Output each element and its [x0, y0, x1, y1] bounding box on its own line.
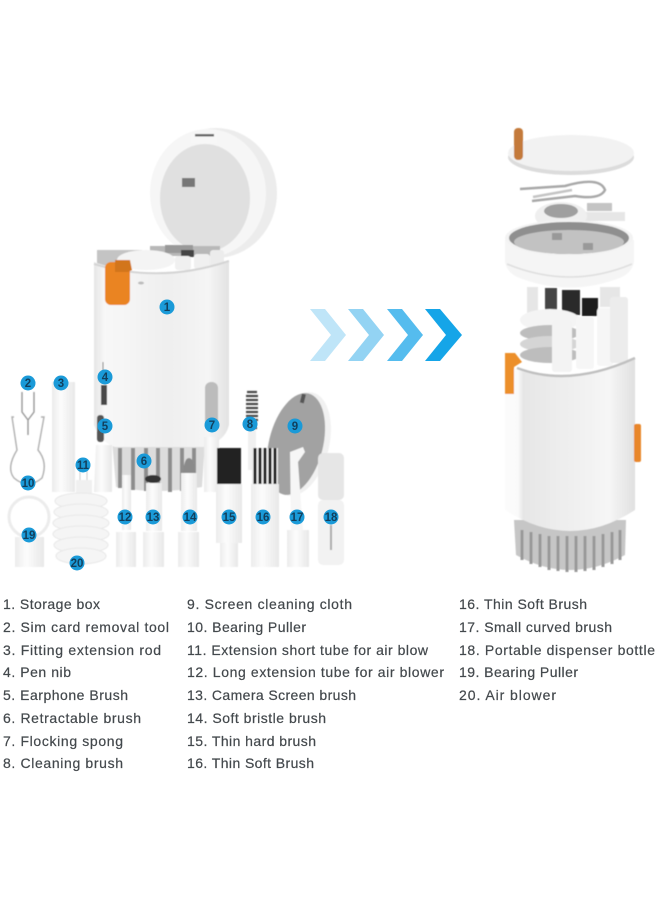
parts list: column 1: [3, 596, 169, 771]
main product: open storage box: [9, 128, 344, 567]
parts list: column 1: 8. Cleaning brush: [3, 755, 123, 771]
parts list: column 2: 15. Thin hard brush: [187, 733, 316, 749]
parts list: column 1: 7. Flocking spong: [3, 733, 123, 749]
tool: bearing puller: [11, 417, 44, 484]
tool: camera screen brush: [143, 475, 164, 567]
tool: air blower: [53, 493, 109, 564]
parts list: column 2: 10. Bearing Puller: [187, 619, 306, 635]
callout badges: [20, 300, 338, 570]
ring tool: [535, 202, 625, 230]
parts list: column 2: 11. Extension short tube for air blow: [187, 642, 429, 658]
storage compartments: [97, 245, 224, 270]
callout badges: 12: [119, 512, 131, 524]
parts list: column 1: 2. Sim card removal tool: [3, 619, 169, 635]
parts list: column 1: 3. Fitting extension rod: [3, 642, 161, 658]
tool: small curved brush: [287, 447, 309, 567]
parts list: column 3: [459, 596, 655, 703]
cylinder body: [505, 358, 635, 531]
storage box body: [94, 262, 229, 447]
callout badges: 17: [291, 512, 303, 524]
parts list: column 2: [187, 596, 444, 771]
parts list: column 1: 6. Retractable brush: [3, 710, 141, 726]
callout badges: 14: [184, 512, 197, 524]
tool: sim card removal tool: [22, 392, 34, 435]
tool: dispenser bottle: [318, 453, 344, 565]
parts list: column 1: 5. Earphone Brush: [3, 687, 128, 703]
parts list: column 2: 9. Screen cleaning cloth: [187, 596, 352, 612]
pen nib and earphone brush: [94, 362, 112, 492]
tool: short tube: [76, 470, 92, 498]
tool: thin soft brush: [251, 448, 279, 567]
bottom brush: [514, 520, 626, 572]
callout badges: 13: [147, 512, 159, 524]
tool: soft bristle brush: [178, 458, 199, 567]
tool: long tube: [116, 475, 136, 567]
metal puller pieces: [520, 182, 605, 201]
callout badges: 7: [209, 420, 215, 432]
cleaning brush: [246, 392, 258, 470]
parts list: column 3: 17. Small curved brush: [459, 619, 612, 635]
parts list: column 3: 20. Air blower: [459, 687, 556, 703]
collar: [505, 220, 634, 288]
parts list: column 2: 12. Long extension tube for air blower: [187, 664, 444, 680]
tool: extension rod: [52, 382, 75, 492]
callout badges: 5: [102, 421, 109, 433]
callout badges: 16: [257, 512, 269, 524]
callout badges: 18: [325, 512, 338, 524]
parts list: column 2: 14. Soft bristle brush: [187, 710, 326, 726]
tool: thin hard brush: [216, 448, 242, 567]
parts list: column 3: 18. Portable dispenser bottle: [459, 642, 655, 658]
orange latch: [105, 262, 130, 305]
stored tools: [520, 287, 628, 372]
screen cleaning cloth: [257, 386, 341, 502]
top lid plate: [508, 128, 634, 175]
orange latches: [505, 353, 522, 394]
parts list: column 3: 16. Thin Soft Brush: [459, 596, 587, 612]
callout badges: 1: [164, 302, 171, 314]
bottom retractable brush: [112, 440, 205, 492]
parts list: column 2: 16. Thin Soft Brush: [187, 755, 314, 771]
open lid: [150, 128, 277, 258]
callout badges: 4: [102, 372, 109, 384]
callout badges: 20: [71, 558, 83, 570]
callout badges: 11: [77, 460, 90, 472]
callout badges: 15: [223, 512, 236, 524]
callout badges: 10: [22, 478, 34, 490]
callout badges: 2: [25, 378, 31, 390]
parts list: column 3: 19. Bearing Puller: [459, 664, 578, 680]
callout badges: 19: [23, 530, 35, 542]
tool: ring puller: [9, 497, 49, 567]
right product: exploded view: [505, 128, 641, 572]
callout badges: 8: [247, 419, 254, 431]
parts list: column 2: 13. Camera Screen brush: [187, 687, 356, 703]
parts list: column 1: 4. Pen nib: [3, 664, 71, 680]
callout badges: 3: [58, 378, 64, 390]
callout badges: 6: [141, 456, 147, 468]
arrows: four chevrons: [310, 309, 462, 361]
callout badges: 9: [292, 421, 298, 433]
parts list: column 1: 1. Storage box: [3, 596, 100, 612]
slot 7 on body: [205, 382, 218, 428]
